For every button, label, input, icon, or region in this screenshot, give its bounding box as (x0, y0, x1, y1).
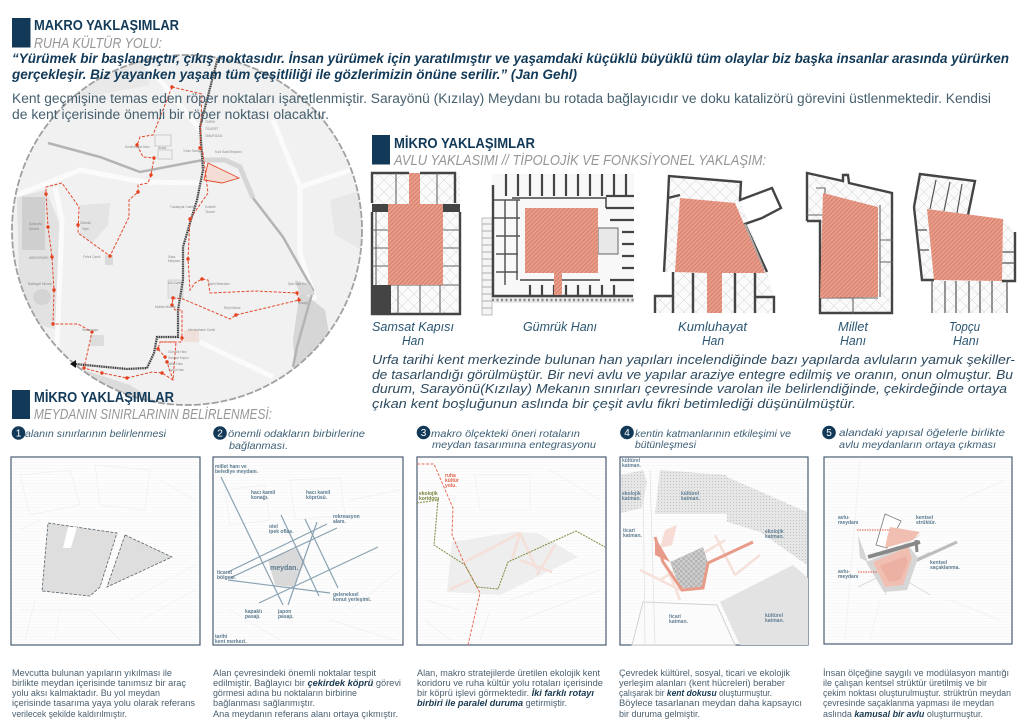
map place labels: TARİHİ (205, 119, 215, 124)
caption 5: çekim noktası oluşturulmuştur. strüktrün meydan (823, 688, 1011, 698)
caption 3: birbiri ile paralel duruma getirmiştir. (417, 698, 567, 708)
heading: Makro Yaklaşımlar: RUHA KÜLTÜR YOLU: (34, 34, 162, 52)
map place labels: Sokağı (298, 301, 308, 305)
map place labels: Şair Nabi Evi (288, 282, 307, 286)
map place labels: Ulu Camii (168, 281, 182, 285)
text block: route intro: de kent içerisinde önemli bir röper noktası olacaktır. (12, 107, 329, 122)
plan: Topçu Hanı (914, 173, 1015, 313)
node labels: ipek oflas. (269, 529, 294, 535)
route labels: ruha (445, 473, 456, 479)
heading: Mikro Yaklaşımlar avlu (372, 135, 766, 169)
layer labels: kültürel (681, 491, 700, 497)
node labels: hacı kamil (251, 490, 276, 496)
map place labels: Arasa (158, 146, 167, 150)
route labels: koridoru (419, 496, 439, 502)
node labels: rekreasyon (333, 514, 360, 520)
meydan footprint (447, 532, 578, 595)
plan: Millet Hanı (807, 173, 893, 313)
node labels: ticaret (217, 570, 232, 576)
map place labels: Müzesi (29, 227, 39, 231)
plan label: Kumluhayat Han: Han (702, 333, 724, 348)
quote: Jan Gehl: “Yürümek bir başlangıçtır, çıkış noktasıdır. İnsan yürümek için yaratılmıştır ve yaşamdaki küçüklü büyüklü tüm olaylar biz başka insanlar arasında yürürken (12, 51, 1009, 66)
text block: han analysis: çıkan kent boşluğunun aslında bir çeşit avlu fikri betimlediği düşünülmüştür. (372, 397, 856, 411)
callout labels: meydanı (838, 520, 859, 526)
node labels: hacı kamil (306, 490, 331, 496)
pale square structure (640, 535, 760, 600)
text block: han analysis (372, 353, 1015, 411)
map place labels: Yıldız Sarayı (183, 149, 201, 153)
step 2 heading: bağlanması. (229, 440, 288, 452)
site polygon east (107, 535, 172, 587)
map place labels: Tepe (82, 227, 89, 231)
map place labels: Samsat Kapısı (168, 356, 189, 360)
plan label: Topçu Hanı: Topçu (949, 319, 980, 334)
map place labels: TİCARET (205, 126, 219, 131)
map place labels: Ticaret (205, 210, 215, 214)
map place labels: Kumluhayat Hanı (125, 145, 150, 149)
step 3 heading: makro ölçekteki öneri rotaların (431, 428, 580, 440)
layer labels: ticari (669, 614, 682, 620)
plan label: Kumluhayat Han: Kumluhayat (678, 319, 748, 334)
node labels: pasajı. (278, 614, 294, 620)
node labels: tarihi (215, 634, 228, 640)
layer labels: katman. (622, 463, 642, 469)
layer labels: katman. (623, 533, 643, 539)
map place labels: Reji Kilisesi (224, 306, 241, 310)
caption 4: Böylece tasarlanan meydan daha kapsayıcı (619, 698, 802, 708)
caption 1: verilecek şekilde kaldırılmıştır. (12, 709, 127, 719)
layer blocks (655, 470, 727, 514)
map place labels: Tuzakçılar Camii (170, 205, 194, 209)
caption 4: çalışarak bir kent dokusu oluşturmuştur. (619, 688, 772, 698)
step 4 heading (620, 426, 791, 451)
step 3 heading: 3 (421, 428, 427, 439)
pale square structure (449, 533, 555, 590)
caption 2: Alan çevresindeki önemli noktalar tespit (213, 668, 377, 678)
route stops (44, 85, 301, 380)
plan label: Topçu Hanı (949, 319, 980, 348)
diagram 5: courtyard squares (824, 457, 1012, 644)
heading: Makro Yaklaşımlar (12, 17, 179, 52)
route: ruha kültür yolu (417, 464, 480, 645)
text block: route intro (12, 91, 991, 122)
site polygon west (42, 523, 117, 596)
plan label: Millet Hanı (838, 319, 869, 348)
caption 4: yerleşim alanları (kent hücreleri) beraber (619, 678, 785, 688)
heading: Mikro Yaklaşımlar avlu: AVLU YAKLASIMI // TİPOLOJİK VE FONKSİYONEL YAKLAŞIM: (393, 152, 766, 169)
arrow: walking axis end (70, 360, 76, 368)
map place labels: Kızıl Saat Meydanı (215, 150, 242, 154)
step 2 heading (213, 426, 365, 452)
callout labels: kentsel (930, 560, 948, 566)
map place labels: Mevlevihane Camii (188, 328, 215, 332)
plan label: Kumluhayat Han (678, 319, 748, 348)
callout labels: meydanı (838, 574, 859, 580)
structural band (868, 542, 920, 557)
map: Ruha kültür yolu circular site map (10, 53, 365, 410)
node labels: konağı. (251, 495, 269, 501)
text block: route intro: Kent geçmişine temas eden röper noktaları işaretlenmiştir. Sarayönü (Kızılay) Meydanı bu rotada bağlayıcıdır ve doku katalizörü görevini üstlenmektedir. Kendisi (12, 91, 991, 106)
lower courtyard (866, 545, 918, 592)
caption 2: Ana meydanın referans alanı ortaya çıkmıştır. (213, 709, 398, 719)
caption 5: çevresinde saçaklanma yapması ile meydan (823, 698, 994, 708)
map place labels: Şanlıurfa (29, 222, 42, 226)
plan: Kumluhayat Han (655, 175, 781, 313)
checker courtyard (670, 547, 708, 588)
map place labels: Balıklıgöl Müzesi (28, 282, 52, 286)
caption 2: edilmiştir. Bağlayıcı bir çekirdek köprü görevi (213, 678, 401, 688)
map place labels: OMURGASI (205, 134, 222, 138)
layer labels: kültürel (622, 458, 641, 464)
node labels: millet hanı ve (215, 464, 247, 470)
map place labels: Gümrük Hanı (168, 350, 187, 354)
step 5 heading: 5 (826, 428, 832, 439)
caption 3 (417, 668, 603, 708)
plan label: Millet Hanı: Hanı (840, 333, 866, 348)
plan label: Millet Hanı: Millet (838, 319, 869, 334)
node labels: kent merkezi. (215, 639, 247, 645)
node labels: bölgesi. (217, 575, 237, 581)
caption 2: bağlanması sağlanmıştır. (213, 698, 315, 708)
caption 2: görmesi adına bu noktaların birbirine (213, 688, 357, 698)
node labels: belediye meydanı. (215, 469, 259, 475)
caption 5: ile çalışan kentsel strüktür üretilmiş ve bir (823, 678, 987, 688)
route labels: ekolojik (419, 491, 438, 497)
map place labels: Fırfırlı Camii (83, 255, 101, 259)
route labels: yolu. (445, 483, 457, 489)
removed road strip (63, 527, 77, 548)
callout labels: avlu- (838, 515, 850, 521)
route: west loop (46, 87, 202, 380)
map place labels: Millet Hanı (168, 362, 183, 366)
heading: Mikro Yaklaşımlar avlu: MİKRO YAKLAŞIMLAR (394, 135, 535, 152)
callout labels (838, 515, 960, 580)
caption 4 (619, 668, 802, 719)
map place labels: Topçu Hanı (168, 368, 184, 372)
step 1 heading: 1 (16, 428, 22, 440)
node labels: pasajı. (245, 614, 261, 620)
text block: han analysis: durum, Sarayönü(Kızılay) Mekanın sınırları çevresinde varolan ile belirlendiğinde, çekirdeğinde ortaya (372, 382, 1007, 396)
step 4 heading: 4 (624, 428, 630, 439)
step 5 heading: avlu meydanların ortaya çıkması (839, 439, 996, 451)
step 5 heading: alandaki yapısal öğelerle birlikte (839, 427, 1005, 439)
route: ekolojik koridor (417, 500, 605, 589)
layer labels: katman. (765, 618, 785, 624)
upper courtyard (885, 527, 920, 548)
node labels: geleneksel (333, 592, 359, 598)
map place labels: Kubbeli (205, 205, 216, 209)
step 4 heading: bütünleşmesi (635, 439, 697, 451)
callout labels: kentsel (916, 515, 934, 521)
node labels (215, 464, 372, 645)
text block: han analysis: Urfa tarihi kent merkezinde bulunan han yapıları incelendiğinde bazı yapılarda avluların yamuk şekiller- (372, 353, 1015, 367)
route labels: kültür (445, 478, 459, 484)
caption 4: bir duruma gelmiştir. (619, 709, 700, 719)
quote: Jan Gehl: gerçekleşir. Biz yayanken yaşam tüm çeşitliliği ile gözlerimizin önüne serilir.” (Jan Gehl) (11, 67, 577, 82)
diagram 2: connected focal points (213, 457, 403, 645)
callout labels: avlu- (838, 569, 850, 575)
heading: Mikro Yaklaşımlar meydan (12, 389, 272, 423)
plan: Gümrük Hanı (482, 174, 634, 315)
layer labels: katman. (681, 496, 701, 502)
caption 4: Çevredek kültürel, sosyal, ticari ve ekolojik (619, 668, 790, 678)
map place labels (28, 119, 308, 372)
step 3 heading: meydan tasarımına entegrasyonu (432, 439, 596, 451)
layer labels: ticari (623, 528, 636, 534)
plan label: Samsat Kapısı Han (372, 319, 454, 348)
map place labels: ARKEOPARK (29, 256, 49, 260)
caption 1: birlikte meydan içerisinde tanımsız bir araç (12, 678, 186, 688)
caption 5: İnsan ölçeğine saygılı ve modülasyon mantığı (823, 668, 1009, 678)
connection lines (221, 477, 378, 605)
layer labels: katman. (669, 619, 689, 625)
step 2 heading: 2 (217, 428, 223, 440)
layer labels: katman. (622, 496, 642, 502)
route labels (419, 473, 459, 502)
node labels: otel (269, 524, 278, 530)
step 3 heading (417, 426, 596, 451)
map place labels: Saka (168, 255, 175, 259)
node labels: konut yerleşimi. (333, 597, 372, 603)
callout labels: saçaklanma. (930, 565, 960, 571)
caption 1 (12, 668, 195, 719)
map place labels: Göbekli (80, 221, 91, 225)
diagram 3: macro routes integration (417, 457, 606, 645)
node labels: japon (277, 609, 291, 615)
outlined lost block (876, 514, 901, 548)
layer labels (622, 458, 785, 625)
plan label: Samsat Kapısı Han: Samsat Kapısı (372, 319, 454, 334)
caption 5 (823, 668, 1011, 719)
layer labels: katman. (765, 534, 785, 540)
layer labels: ekolojik (622, 491, 641, 497)
caption 5: aslında kamusal bir avlu oluşturmuştur. (823, 709, 983, 719)
caption 1: Mevcutta bulunan yapıların yıkılması ile (12, 668, 172, 678)
caption 3: Alan, makro stratejilerde üretilen ekolojik kent (417, 668, 600, 678)
layer labels: ekolojik (765, 529, 784, 535)
step 5 heading (822, 426, 1005, 451)
layer labels: kültürel (765, 613, 784, 619)
caption 1: yolu aksı kalmaktadır. Bu yol meydan (12, 688, 160, 698)
plan: Samsat Kapısı Han (372, 173, 460, 314)
map place labels: Mutfak Müzesi (155, 305, 176, 309)
caption 3: koridoru ve ruha kültür yolu rotaları içerisinde (417, 678, 603, 688)
red connector (655, 537, 753, 590)
callout labels: strüktür. (916, 520, 937, 526)
route: east loop (160, 148, 299, 342)
node labels: kapaklı (245, 609, 263, 615)
step 4 heading: kentin katmanlarının etkileşimi ve (635, 428, 791, 440)
node labels: meydan. (270, 565, 298, 572)
heading: Mikro Yaklaşımlar meydan: MEYDANIN SINIRLARININ BELİRLENMESİ: (34, 406, 272, 423)
plan label: Gümrük Hanı: Gümrük Hanı (523, 319, 597, 334)
heading: Mikro Yaklaşımlar meydan: MİKRO YAKLAŞIMLAR (34, 389, 174, 406)
diagram 4: urban layers (620, 457, 808, 645)
node labels: köprüsü. (306, 495, 328, 501)
map place labels: Tarihi Bedesten (208, 282, 230, 286)
map place labels: Meydanı (168, 259, 180, 263)
context streets (858, 535, 930, 595)
heading: Makro Yaklaşımlar: MAKRO YAKLAŞIMLAR (34, 17, 179, 34)
quote: Jan Gehl (11, 51, 1009, 82)
callout lines (857, 530, 890, 572)
node labels: alanı. (333, 519, 346, 525)
meydan shape (268, 548, 305, 587)
step 2 heading: önemli odakların birbirlerine (228, 428, 365, 440)
text block: han analysis: de tasarlandığı görülmüştür. Bir nevi avlu ve yapılar araziye entegre edilmiş ve oranın, onun olmuştur. Bu (372, 368, 1013, 382)
map place labels: Hasanpaşa (82, 328, 98, 332)
caption 2 (213, 668, 401, 719)
step 1 heading: alanın sınırlarının belirlenmesi (25, 428, 167, 440)
caption 1: içerisinde tasarıma yaya yolu olarak referans (12, 698, 195, 708)
caption 3: bir köprü işlevi görmektedir. İki farklı rotayı (417, 688, 595, 698)
plan label: Topçu Hanı: Hanı (953, 333, 979, 348)
diagram 1: site boundaries (11, 457, 200, 645)
plan label: Samsat Kapısı Han: Han (402, 333, 424, 348)
